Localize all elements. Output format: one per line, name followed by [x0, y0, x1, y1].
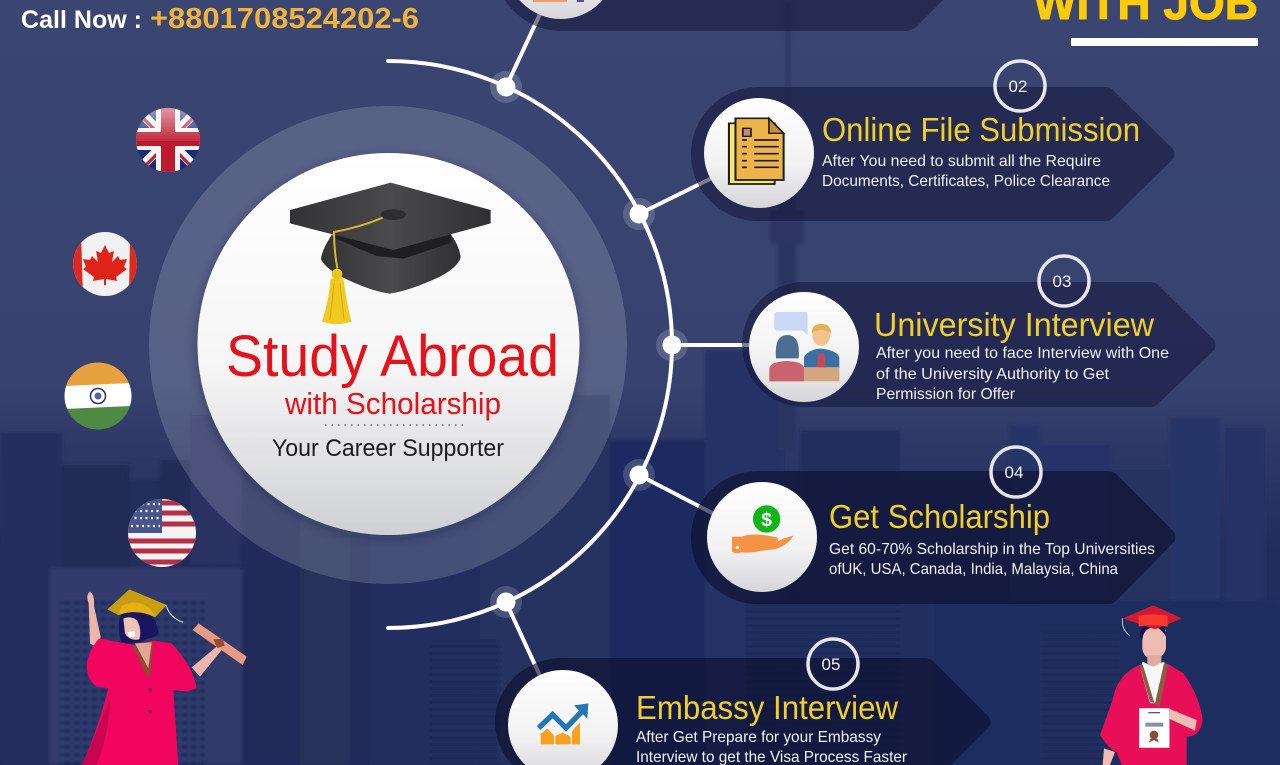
step 02 description	[822, 153, 1110, 190]
number badge 04: 04	[1005, 463, 1023, 482]
tagline: Your Career Supporter	[272, 435, 504, 462]
icon: interview people	[769, 312, 839, 381]
illustration: male graduate	[1100, 605, 1203, 765]
number badge 03: 03	[1053, 272, 1071, 291]
icon: growth chart	[539, 703, 588, 744]
call now phone line: +8801708524202-6	[150, 3, 419, 35]
step 04 panel: get scholarship	[691, 447, 1176, 604]
step 03 description: After you need to face Interview with One	[876, 345, 1169, 362]
step 05 panel: embassy interview	[495, 639, 990, 765]
step 03 description	[876, 345, 1169, 403]
step 04 heading: Get Scholarship	[829, 498, 1050, 535]
timeline arc	[388, 61, 672, 628]
heading fragment: with job	[1033, 0, 1258, 46]
step 03 panel: university interview	[742, 256, 1216, 407]
step 04 description	[829, 541, 1155, 578]
flag: United States	[127, 498, 197, 568]
illustration: female graduate	[82, 589, 247, 765]
central disc with title	[198, 153, 580, 535]
title: study abroad: Study Abroad	[226, 324, 559, 389]
icon: hand with dollar coin	[732, 505, 793, 553]
step 04 description: ofUK, USA, Canada, India, Malaysia, China	[829, 561, 1118, 578]
number badge 05: 05	[822, 655, 840, 674]
step 05 description: After Get Prepare for your Embassy	[636, 729, 881, 746]
call now phone line	[21, 3, 419, 35]
number badge 03	[1039, 256, 1089, 306]
step 01 icon disc	[506, 0, 616, 19]
icon: documents	[729, 118, 784, 184]
step 03 description: of the University Authority to Get	[876, 366, 1110, 383]
number badge 04	[991, 447, 1041, 497]
step 02 description: After You need to submit all the Require	[822, 153, 1101, 170]
number badge 02	[995, 61, 1045, 111]
step 03 heading: University Interview	[874, 306, 1154, 343]
flag: India	[64, 362, 132, 430]
number badge 02: 02	[1009, 77, 1027, 96]
step 05 heading: Embassy Interview	[636, 689, 898, 726]
number badge 05	[808, 639, 858, 689]
timeline nodes	[490, 71, 688, 618]
step 01 banner (cropped at top)	[505, 0, 943, 31]
step 02 heading: Online File Submission	[822, 111, 1140, 148]
connectors	[506, 14, 752, 678]
step 03 description: Permission for Offer	[876, 386, 1016, 403]
call now phone line: Call Now :	[21, 6, 142, 34]
step 05 description	[636, 729, 908, 765]
icon: hand with dollar coin: $	[761, 510, 772, 531]
flag: Canada	[73, 232, 137, 296]
subtitle: with scholarship: with Scholarship	[284, 386, 501, 421]
graduation cap icon	[290, 183, 491, 324]
step 04 description: Get 60-70% Scholarship in the Top Universities	[829, 541, 1155, 558]
outer translucent ring	[149, 106, 627, 584]
flag: United Kingdom	[136, 108, 200, 172]
step 02 panel: online file submission	[691, 61, 1174, 221]
step 02 description: Documents, Certificates, Police Clearance	[822, 173, 1110, 190]
